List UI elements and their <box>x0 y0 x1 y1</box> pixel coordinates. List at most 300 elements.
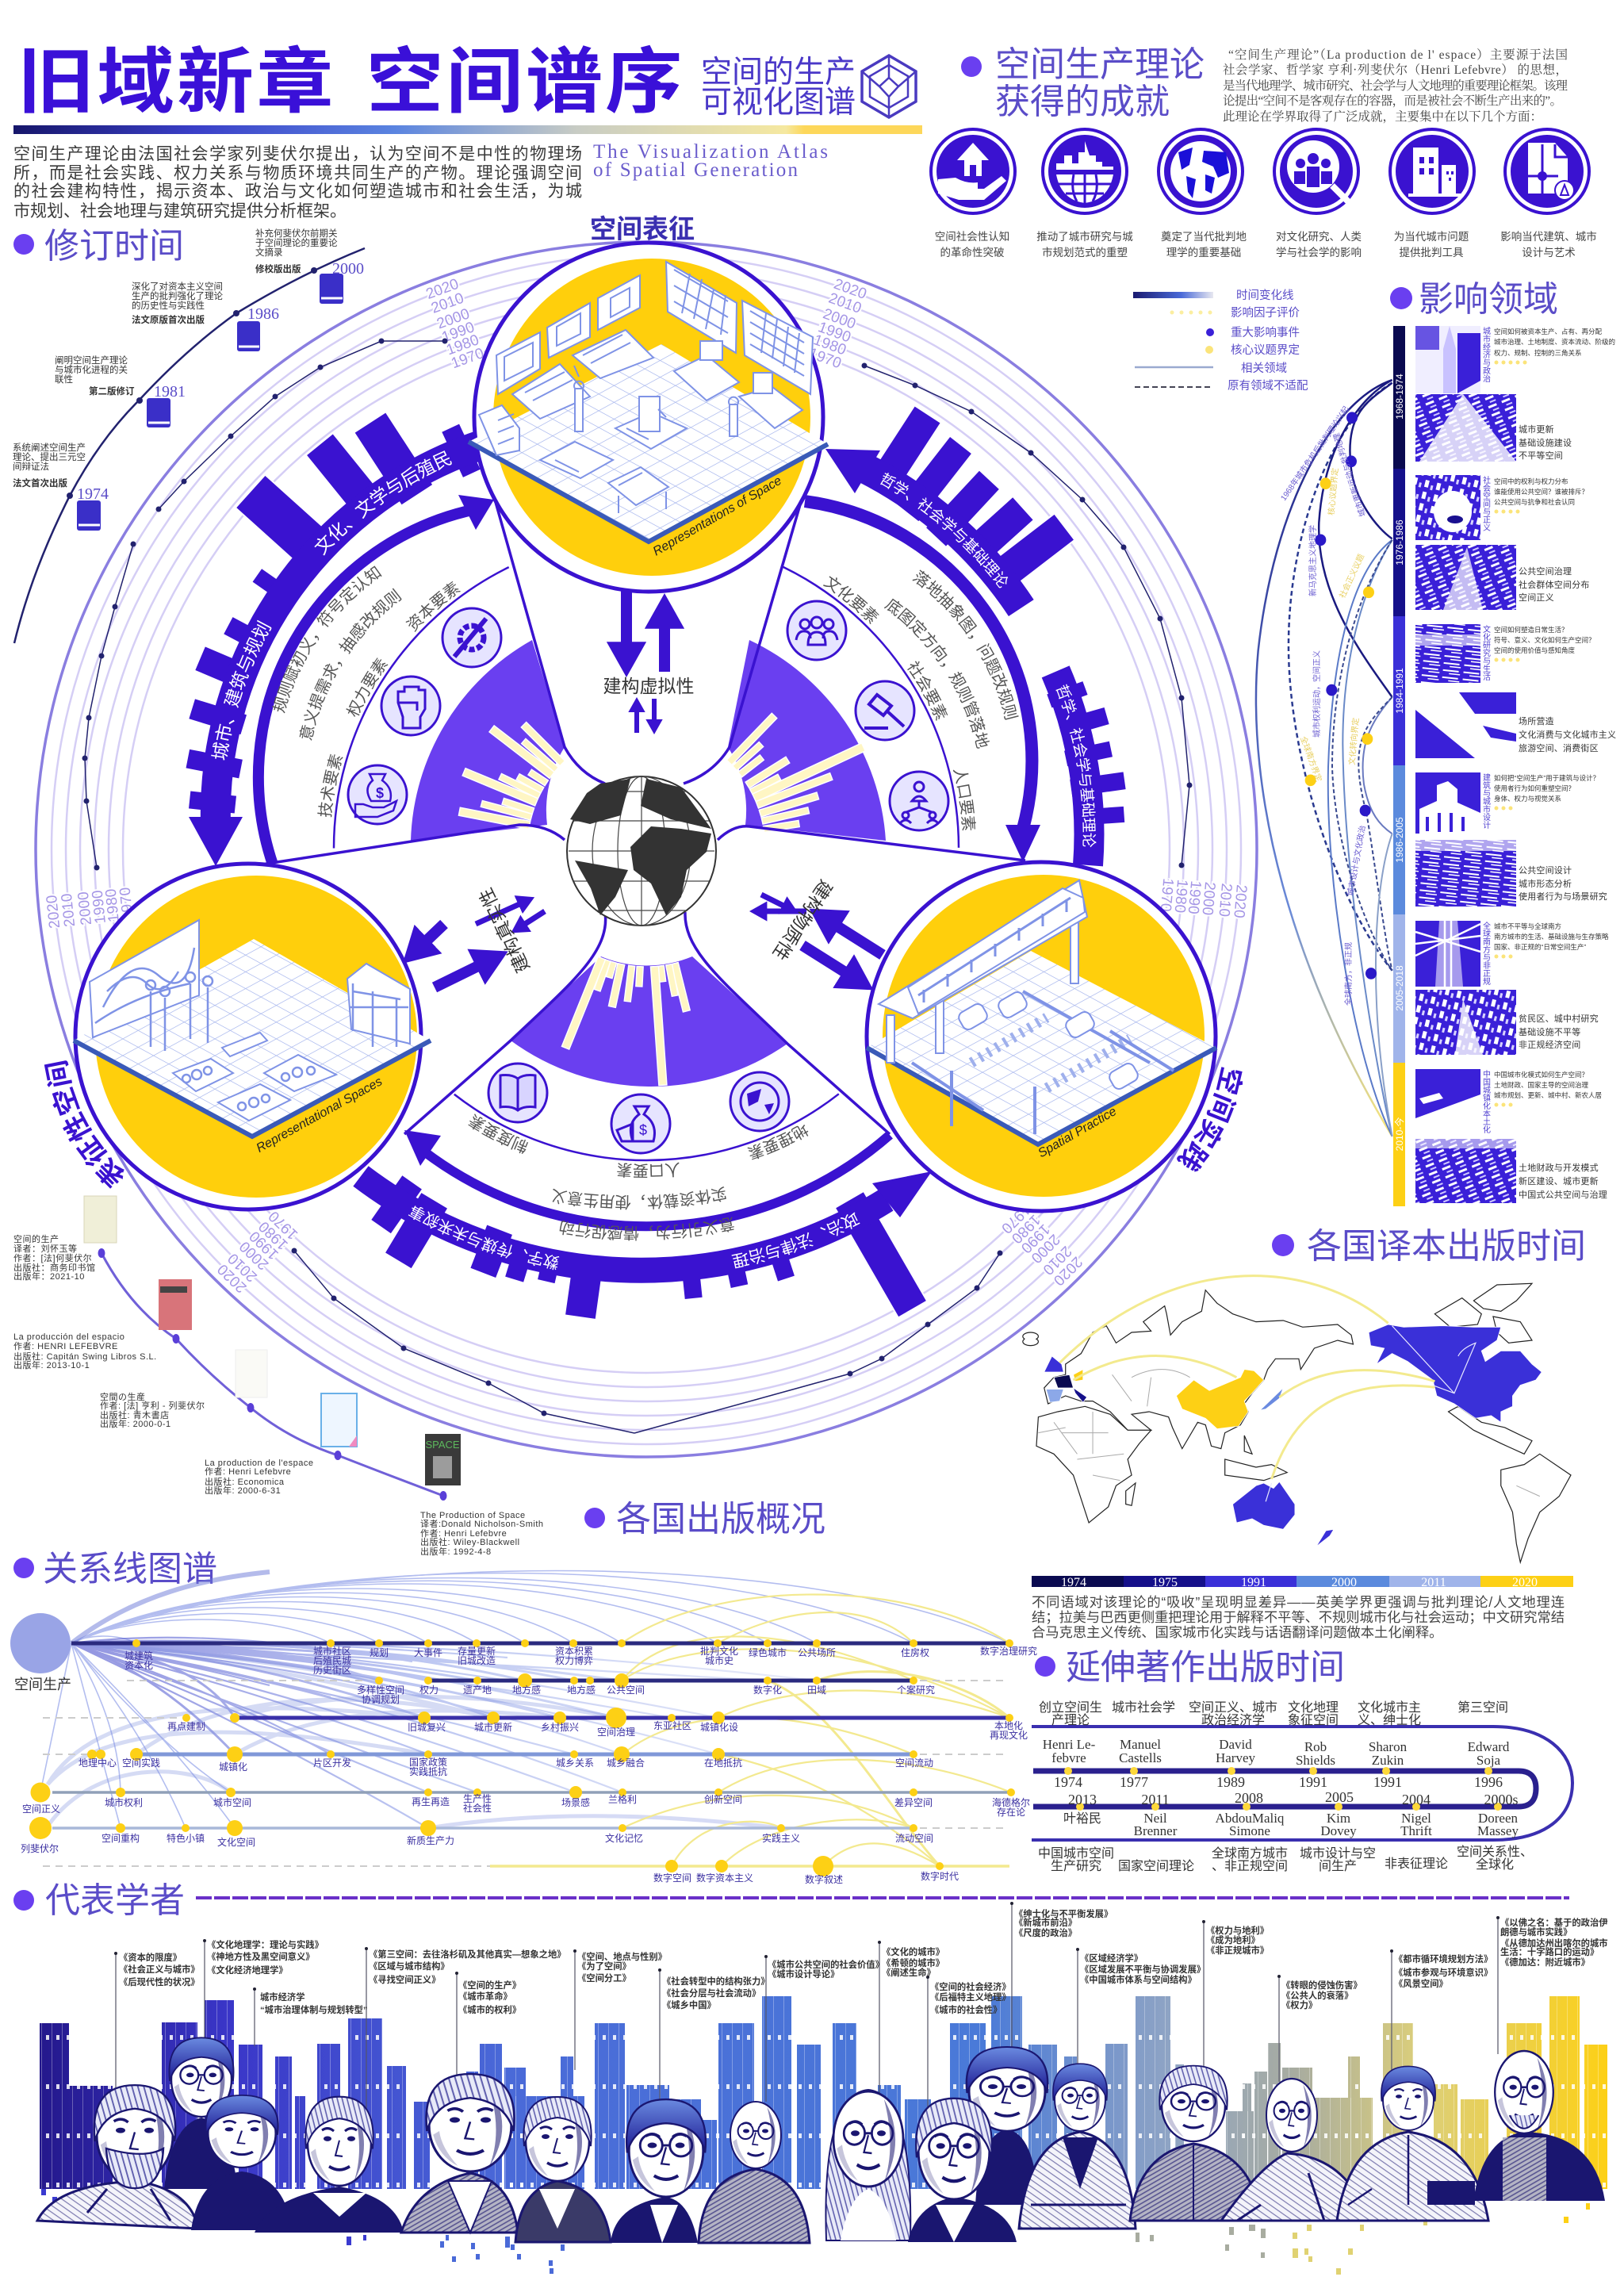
scholar notes: 《文化经济地理学》 <box>207 1964 288 1976</box>
lower names: Brenner <box>1134 1823 1178 1838</box>
icon: people <box>787 601 846 660</box>
revision notes: 第二版修订 <box>89 385 135 397</box>
node labels: 遗产地 <box>463 1685 492 1696</box>
node labels: 住房权 <box>901 1646 929 1658</box>
field 2: social justice: 社会空间与正义 <box>1481 475 1491 531</box>
scholar notes: 《后福特主义地理》 <box>930 1991 1011 2003</box>
lower topics <box>1038 1845 1533 1873</box>
years: 2013 <box>1068 1792 1097 1807</box>
element labels along ring: 社会要素 <box>907 661 948 721</box>
year labels on rings: 2010 <box>59 892 79 928</box>
upper names: David <box>1219 1737 1252 1752</box>
revision timeline with books: 1974 <box>77 485 109 503</box>
field 4: architecture: 建筑与城市设计 <box>1481 772 1491 830</box>
years: 1989 <box>1216 1774 1245 1790</box>
node labels: 城市史 <box>705 1654 733 1666</box>
map paragraph <box>1032 1594 1565 1640</box>
scholar notes: 《成为地利》 <box>1206 1934 1260 1945</box>
node labels: 田域 <box>807 1685 826 1696</box>
scholar notes: 《风景空间》 <box>1394 1978 1448 1989</box>
scholar notes: 《后现代性的状况》 <box>119 1976 200 1987</box>
icon: city globe <box>1043 129 1127 213</box>
book notes: 作者: Henri Lefebvre <box>420 1528 507 1539</box>
outer band: philosophy: 哲学、社会学与基础理论 <box>880 473 1009 588</box>
scholar notes: 《公共人的衰落》 <box>1281 1990 1353 2001</box>
element icons <box>348 601 948 1153</box>
icon: books <box>77 274 343 531</box>
node labels: 地方感 <box>512 1684 541 1696</box>
field 3: culture: 场所营造 <box>1519 715 1554 726</box>
icon: buildings <box>1390 129 1474 213</box>
element labels along ring: 人口要素 <box>617 1163 680 1178</box>
element labels along ring: 技术要素 <box>317 753 343 817</box>
year labels on rings: 2020 <box>424 276 461 303</box>
field 5: global south: 城市不平等与全球南方 <box>1494 922 1561 930</box>
node labels: 空间重构 <box>102 1832 140 1844</box>
icon: document <box>1505 129 1589 213</box>
globe <box>567 776 716 926</box>
field 6: china: 中国式公共空间与治理 <box>1519 1189 1607 1200</box>
scholar notes: 《权力》 <box>1281 1999 1317 2010</box>
funnel arrows and labels <box>427 591 883 987</box>
scholar notes: 《城市革命》 <box>458 1991 512 2002</box>
concentric year rings <box>36 242 1257 1457</box>
book notes: 作者: HENRI LEFEBVRE <box>13 1341 118 1351</box>
element labels along ring <box>317 576 976 1178</box>
book notes: 空間の生産 <box>100 1391 146 1402</box>
icon captions: 学与社会学的影响 <box>1276 247 1362 259</box>
revision timeline with books: 1986 <box>247 305 279 323</box>
revision notes: 的历史性与实践性 <box>132 300 205 311</box>
field 1: urban political economy: 城市经济与政治 <box>1481 327 1491 383</box>
year labels on rings: 1980 <box>811 332 848 358</box>
year labels on rings: 2000 <box>236 1238 272 1273</box>
node labels: 后殖民城 <box>313 1654 351 1666</box>
portrait 7 <box>611 2099 706 2243</box>
field 1: urban political economy: 城市治理、土地制度、资本流动、阶级的 <box>1494 338 1615 346</box>
year labels on rings: 1970 <box>117 887 137 922</box>
node labels: 海德格尔 <box>992 1796 1030 1808</box>
influence links <box>1256 380 1392 1137</box>
book notes: 出版社: 青木書店 <box>100 1409 170 1420</box>
upper names: Rob <box>1304 1739 1327 1754</box>
portrait 6 <box>515 2097 611 2242</box>
year labels on rings: 2020 <box>832 276 868 303</box>
revision notes: 间辩证法 <box>13 461 49 472</box>
upper names: Edward <box>1468 1739 1510 1754</box>
field 5: global south: 全球南方与非正规 <box>1481 921 1491 985</box>
year labels on rings: 2000 <box>1028 1231 1063 1266</box>
upper names: Sharon <box>1369 1739 1408 1754</box>
era band: 1984-1991 <box>1394 668 1405 714</box>
inner arrows <box>259 495 1040 1226</box>
upper names: Harvey <box>1216 1750 1256 1765</box>
desks and figures <box>479 330 802 505</box>
year labels on rings: 1990 <box>1017 1221 1053 1256</box>
upper topics: 空间正义、城市 <box>1189 1700 1277 1715</box>
heading: achievements: 空间生产理论 <box>995 45 1205 84</box>
field 5: global south: 南方城市的生活、基础设施与生存策略 <box>1494 933 1609 941</box>
field 2: social justice: 社会群体空间分布 <box>1519 579 1590 590</box>
circle: representational spaces <box>74 864 431 1209</box>
year labels on rings: 1980 <box>256 1217 292 1253</box>
icon: planet <box>730 1072 789 1131</box>
curved captions: 意义引行为，情感促行动 <box>560 1217 734 1240</box>
node labels: 数字时代 <box>921 1870 959 1882</box>
year labels on rings: 1990 <box>247 1228 282 1263</box>
year labels on rings: 2000 <box>821 305 858 333</box>
curved captions: 意义提需求，抽感改规则 <box>300 588 401 741</box>
node labels: 城市权利 <box>105 1796 143 1808</box>
scholar notes: 《文化的城市》 <box>882 1946 944 1957</box>
achievements paragraph <box>1223 48 1568 124</box>
year labels on rings: 2000 <box>435 305 472 333</box>
scholar notes: 《社会分层与社会流动》 <box>662 1987 760 1999</box>
influence images <box>1415 326 1616 1203</box>
node labels: 个案研究 <box>897 1684 935 1696</box>
year labels on rings: 2010 <box>1215 883 1235 918</box>
scholar notes: 《资本的限度》 <box>119 1952 182 1963</box>
years: 1977 <box>1120 1774 1148 1790</box>
icon: gear pencil <box>442 608 501 667</box>
lower names: AbdouMaliq <box>1216 1811 1285 1826</box>
legend: 时间变化线 <box>1236 289 1294 302</box>
links <box>40 1570 1009 1828</box>
field 3: culture: 旅游空间、消费街区 <box>1519 742 1599 753</box>
icon: house in hand <box>931 129 1015 213</box>
revision notes: 阐明空间生产理论 <box>55 355 128 366</box>
field 4: architecture: 公共空间设计 <box>1519 864 1572 876</box>
node labels: 权力博弈 <box>555 1654 593 1666</box>
node labels: 差异空间 <box>894 1797 933 1808</box>
scholar notes: “城市治理体制与规划转型” <box>260 2004 368 2015</box>
field 1: urban political economy <box>1415 326 1615 462</box>
years: 2008 <box>1235 1790 1263 1806</box>
node labels: 大事件 <box>414 1647 442 1658</box>
funnel text: 建构虚拟性 <box>603 676 695 696</box>
upper names: Castells <box>1119 1750 1162 1765</box>
portrait 12 <box>1019 2064 1136 2229</box>
scholar notes: 《区域发展不平衡与协调发展》 <box>1080 1964 1205 1975</box>
field 5: global south: 贫民区、城中村研究 <box>1519 1013 1599 1024</box>
revision timeline with books: 2000 <box>332 260 364 278</box>
book notes: 出版年: 1992-4-8 <box>420 1546 492 1557</box>
link labels: 城市设计与文化政治 <box>1345 825 1368 897</box>
year labels on rings: 1980 <box>1171 879 1190 914</box>
node labels: 乡村振兴 <box>541 1722 579 1733</box>
legend: 原有领域不适配 <box>1228 379 1308 393</box>
years: 2005 <box>1325 1789 1354 1805</box>
skyline <box>40 1996 1607 2189</box>
year labels on rings: 1970 <box>998 1201 1033 1236</box>
icon captions <box>935 230 1597 259</box>
icon captions: 市规划范式的重塑 <box>1042 246 1128 259</box>
revision notes <box>13 228 338 489</box>
icon: crowd magnifier <box>1274 129 1358 213</box>
node labels: 空间流动 <box>895 1757 933 1769</box>
english subtitle <box>593 141 828 181</box>
revision notes: 补充何斐伏尔前期关 <box>255 228 338 239</box>
portrait 10 <box>908 2099 1017 2242</box>
portrait 14 <box>1221 2079 1368 2221</box>
lower names: Kim <box>1327 1811 1350 1826</box>
title: 旧域新章 <box>17 41 336 121</box>
node labels: 存在论 <box>997 1807 1025 1818</box>
field 4: architecture: 城市形态分析 <box>1519 878 1572 889</box>
field 4: architecture: 身体、权力与视觉关系 <box>1494 795 1561 803</box>
map legend bar: 1991 <box>1241 1576 1266 1589</box>
year labels on rings: 2020 <box>1230 884 1250 918</box>
circle: representational spaces: Representational Spaces <box>255 1075 385 1156</box>
subtitle: 可视化图谱 <box>701 86 856 120</box>
field 3: culture <box>1415 624 1616 758</box>
upper names: Manuel <box>1120 1737 1161 1752</box>
node labels: 旧城改造 <box>458 1655 496 1666</box>
scholar notes: 《神地方性及黑空间意义》 <box>207 1951 315 1962</box>
circle captions: 表征性空间 <box>44 1060 124 1189</box>
funnel text: 建构真实性 <box>475 885 534 976</box>
year labels on rings: 2020 <box>214 1260 250 1296</box>
revision notes: 生产的批判强化了理论 <box>132 290 223 301</box>
map legend bar <box>1032 1576 1573 1589</box>
node labels: 多样性空间 <box>357 1684 404 1696</box>
field 6: china <box>1415 1069 1607 1203</box>
graph rows <box>43 1643 1009 1866</box>
root node <box>10 1613 71 1673</box>
node labels: 数字叙述 <box>805 1873 843 1885</box>
node labels: 生产性 <box>463 1793 492 1804</box>
outer band: philosophy <box>794 374 1149 898</box>
node labels: 数字资本主义 <box>696 1872 753 1884</box>
scholar notes: 《城市公共空间的社会价值》 <box>768 1959 884 1970</box>
upper topics: 文化城市主 <box>1358 1700 1421 1715</box>
field 6: china: 土地财政与开发模式 <box>1519 1162 1599 1173</box>
lower topics: 非表征理论 <box>1385 1857 1448 1871</box>
scholar notes: 《第三空间：去往洛杉矶及其他真实—想象之地》 <box>369 1949 566 1960</box>
achievements paragraph: 此理论在学界取得了广泛成就，主要集中在以下几个方面： <box>1223 109 1542 124</box>
outer band: culture and urbanism: 城市、建筑与规划 <box>211 620 271 760</box>
icon: world map <box>1159 129 1243 213</box>
revision notes: 修校版出版 <box>255 263 301 274</box>
node labels: 城建筑 <box>124 1650 153 1662</box>
field 4: architecture: 如何把“空间生产”用于建筑与设计？ <box>1494 774 1599 782</box>
outer band: philosophy: 哲学、社会学与基础理论 <box>1055 684 1096 847</box>
link labels: 城市更新运动与批判地理 <box>1331 431 1368 518</box>
node labels: 绿色城市 <box>749 1646 787 1658</box>
portrait 5 <box>401 2074 518 2233</box>
book covers: SPACE <box>425 1439 460 1451</box>
book notes: La production de l'espace <box>205 1458 314 1468</box>
node labels: 资本积累 <box>555 1646 593 1657</box>
text: 文化转向界定 <box>1346 717 1361 765</box>
subtitle <box>701 56 856 120</box>
revision notes: 深化了对资本主义空间 <box>132 281 223 292</box>
field 1: urban political economy: 不平等空间 <box>1519 450 1563 461</box>
intro text: 的社会建构特性，揭示资本、政治与文化如何塑造城市和社会生活，为城 <box>13 182 582 201</box>
year labels on rings: 2010 <box>225 1250 261 1285</box>
lower topics: 生产研究 <box>1051 1859 1101 1873</box>
lower topics: 全球化 <box>1476 1857 1514 1872</box>
link labels: 1968年城市危机后批判理论兴起 <box>1278 404 1351 503</box>
map paragraph: 结；拉美与巴西更侧重把理论用于解释不平等、不规则城市化与社会运动；中文研究常结 <box>1032 1609 1565 1625</box>
intro text: 市规划、社会地理与建筑研究提供分析框架。 <box>13 202 347 220</box>
book notes: The Production of Space <box>420 1511 526 1520</box>
node labels: 流动空间 <box>895 1833 933 1844</box>
years: 1974 <box>1054 1774 1082 1790</box>
field 1: urban political economy: 空间如何被资本生产、占有、再分配 <box>1494 328 1603 335</box>
heading: revision time: 修订时间 <box>44 227 184 266</box>
element labels along ring: 制度要素 <box>468 1114 528 1154</box>
years: 2004 <box>1402 1792 1431 1807</box>
era band: 1976-1986 <box>1394 519 1405 565</box>
years: 1996 <box>1474 1774 1503 1790</box>
map legend bar: 2020 <box>1512 1576 1538 1589</box>
field 6: china: 中国城镇化本土化 <box>1481 1069 1491 1133</box>
wall frames <box>496 262 813 394</box>
outer band: politics and digital: 政治、法律与治理 <box>731 1212 860 1269</box>
intro text: 空间生产理论由法国社会学家列斐伏尔提出，认为空间不是中性的物理场 <box>13 145 582 163</box>
revision timeline with books <box>13 228 365 643</box>
scholar notes: 《空间分工》 <box>577 1972 631 1984</box>
portrait 16 <box>1473 2051 1605 2201</box>
text: 全球南方界定 <box>1298 735 1324 783</box>
field 6: china: 新区建设、城市更新 <box>1519 1175 1599 1186</box>
element labels along ring: 地理要素 <box>747 1125 809 1159</box>
extended works timeline <box>1032 1700 1572 1873</box>
upper topics: 城市社会学 <box>1112 1700 1175 1715</box>
year labels on rings: 2010 <box>429 290 466 317</box>
fan to lower rows <box>71 1638 817 1828</box>
lower names: Neil <box>1143 1811 1167 1826</box>
element labels along ring: 人口要素 <box>953 769 976 831</box>
legend: 重大影响事件 <box>1231 326 1300 339</box>
achievements paragraph: 是当代地理学、城市研究、社会学与人文地理的重要理论框架。该理 <box>1223 78 1568 93</box>
node labels: 国家政策 <box>409 1756 447 1768</box>
node labels: 社会性 <box>463 1802 492 1814</box>
icon captions: 理学的重要基础 <box>1166 246 1241 259</box>
node labels: 数字化 <box>753 1684 782 1696</box>
translation map <box>1023 1276 1571 1562</box>
rating stars <box>1494 360 1527 1107</box>
upper topics: 象征空间 <box>1288 1713 1339 1727</box>
map legend bar: 2000 <box>1331 1576 1357 1589</box>
scholar notes: 《城市设计导论》 <box>768 1968 839 1980</box>
lower topics: 、非正规空间 <box>1212 1859 1288 1873</box>
icon: money bags: $ <box>639 1122 647 1138</box>
heading: representations: 空间表征 <box>590 214 695 243</box>
field 4: architecture: 使用者行为与场景研究 <box>1519 891 1607 902</box>
field 2: social justice: 空间中的权利与权力分布 <box>1494 477 1568 485</box>
scholar notes: 城市经济学 <box>260 1991 304 2003</box>
node labels: 城镇化设 <box>700 1722 738 1733</box>
book notes: 作者: [法] 亨利 - 列斐伏尔 <box>100 1400 205 1411</box>
icon: money hand <box>348 765 407 824</box>
book editions timeline <box>13 1196 544 1557</box>
field 2: social justice: 谁能使用公共空间？谁被排斥？ <box>1494 488 1588 496</box>
portrait 8 <box>699 2102 810 2243</box>
node labels: 实践抵抗 <box>409 1765 447 1777</box>
field 3: culture: 空间如何塑造日常生活？ <box>1494 626 1568 634</box>
book notes: 出版年: 2000-6-31 <box>205 1485 281 1496</box>
year labels on rings: 1990 <box>439 319 477 346</box>
heading: achievements <box>961 45 1205 121</box>
era band: 1986-2005 <box>1394 817 1405 863</box>
portrait 2 <box>164 2037 238 2189</box>
portrait 9 <box>825 2090 910 2240</box>
upper topics: 第三空间 <box>1457 1700 1508 1715</box>
scholar notes: 《权力与地利》 <box>1206 1925 1269 1936</box>
icon captions: 空间社会性认知 <box>935 230 1009 243</box>
label: Representations of Space <box>651 474 784 558</box>
revision notes: 联性 <box>55 374 73 385</box>
revision notes: 法文原版首次出版 <box>132 314 205 325</box>
circle captions: 空间实践 <box>1177 1067 1243 1172</box>
field 2: social justice: 公共空间治理 <box>1519 565 1572 577</box>
lower names: Massey <box>1477 1823 1519 1838</box>
book notes: La producción del espacio <box>13 1332 124 1342</box>
node labels: 文化空间 <box>217 1836 255 1848</box>
english subtitle: of Spatial Generation <box>593 159 798 181</box>
map legend bar: 2011 <box>1421 1576 1446 1589</box>
legend: 影响因子评价 <box>1231 306 1300 320</box>
subtitle: 空间的生产 <box>701 56 856 90</box>
scholar notes: 《城市参观与环境意识》 <box>1394 1967 1492 1978</box>
node labels: 空间正义 <box>22 1803 60 1815</box>
year labels on rings: 1970 <box>266 1207 301 1243</box>
node labels: 城市空间 <box>213 1796 251 1808</box>
year labels on rings: 2010 <box>1040 1243 1074 1278</box>
node labels: 创新空间 <box>704 1793 742 1805</box>
bars: cream fans <box>458 713 865 1086</box>
scholar notes: 《从德加达州出喀尔的城市 <box>1500 1938 1608 1949</box>
upper names: Soja <box>1477 1753 1501 1768</box>
title <box>17 41 685 121</box>
year labels on rings: 1980 <box>444 332 481 358</box>
book notes: 译者:Donald Nicholson-Smith <box>420 1519 544 1529</box>
year labels on rings: 1990 <box>1185 880 1204 914</box>
node labels: 再点建制 <box>167 1721 205 1732</box>
years: 1991 <box>1373 1774 1402 1790</box>
icon: hex cube <box>862 56 916 117</box>
scholar notes: 《区域与城市结构》 <box>369 1961 450 1972</box>
lower names <box>1063 1811 1519 1838</box>
revision notes: 文摘录 <box>255 247 282 258</box>
lower topics: 空间关系性、 <box>1457 1845 1533 1859</box>
book notes <box>13 1233 544 1557</box>
achievements paragraph: 论提出“空间不是客观存在的容器，而是被社会不断生产出来的”。 <box>1223 93 1562 108</box>
node labels: 数字空间 <box>653 1872 691 1884</box>
legend: 核心议题界定 <box>1231 343 1300 357</box>
icon: money hand: $ <box>376 785 384 801</box>
node labels: 在地抵抗 <box>704 1757 742 1769</box>
map legend bar: 1975 <box>1152 1576 1178 1589</box>
curved captions: 规则赋初义，符号定认知 <box>272 565 382 714</box>
icon captions: 为当代城市问题 <box>1394 230 1469 243</box>
pixel dissolve <box>41 2189 1599 2275</box>
outer band: culture and urbanism <box>186 412 481 864</box>
node labels: 公共场所 <box>798 1647 836 1658</box>
icon captions: 的革命性突破 <box>940 246 1004 259</box>
element labels along ring: 文化要素 <box>823 576 879 624</box>
node labels: 地方感 <box>567 1684 596 1696</box>
circle captions <box>44 1060 1243 1189</box>
field 1: urban political economy: 基础设施建设 <box>1519 437 1572 448</box>
node labels: 本地化 <box>994 1720 1023 1731</box>
scholar notes: 《尺度的政治》 <box>1014 1927 1077 1938</box>
scholar notes: 《区域经济学》 <box>1080 1953 1143 1964</box>
scholar notes: 《城乡中国》 <box>662 1999 716 2010</box>
year labels on rings: 2020 <box>1050 1253 1086 1289</box>
